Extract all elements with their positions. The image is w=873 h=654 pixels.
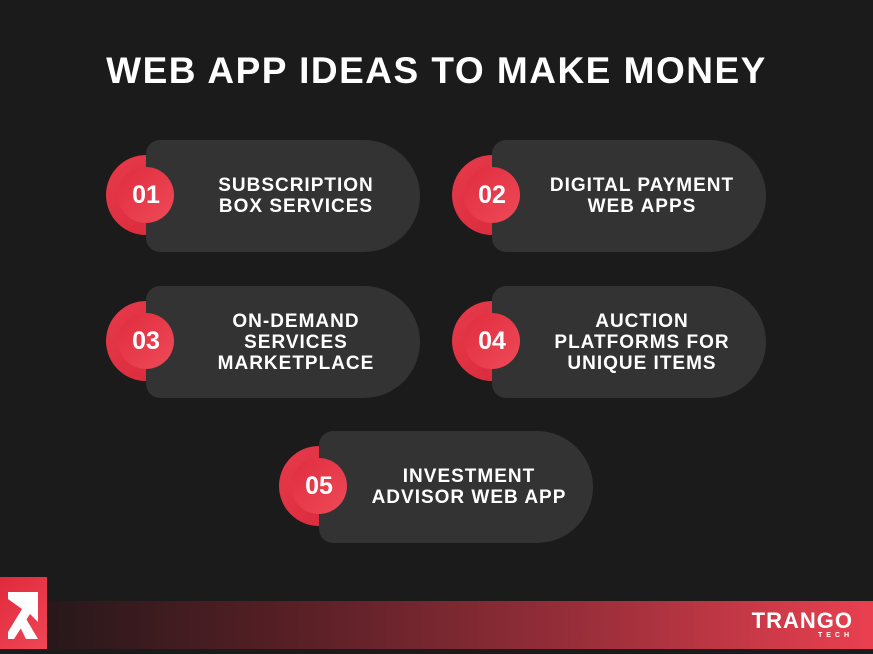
item 01: BOX SERVICES <box>219 196 373 217</box>
item 03: ON-DEMAND <box>232 310 360 332</box>
item 03: 03 <box>132 327 160 355</box>
item 04: PLATFORMS FOR <box>554 332 730 352</box>
item 01: SUBSCRIPTION <box>218 175 374 196</box>
item 04 <box>452 286 766 398</box>
logo icon square <box>0 577 47 649</box>
item 01: 01 <box>132 181 160 209</box>
item 02 <box>452 140 766 252</box>
title: WEB APP IDEAS TO MAKE MONEY <box>106 50 767 91</box>
item 02: 02 <box>478 181 506 209</box>
footer bar <box>0 601 873 649</box>
item 05 <box>279 431 593 543</box>
item 05: 05 <box>305 472 333 500</box>
item 04: 04 <box>478 327 506 355</box>
item 04: UNIQUE ITEMS <box>567 352 717 374</box>
item 05: INVESTMENT <box>403 466 535 487</box>
brand logo text: TRANGO <box>752 608 853 633</box>
item 03: MARKETPLACE <box>218 352 374 374</box>
item 02: WEB APPS <box>588 196 696 217</box>
item 05: ADVISOR WEB APP <box>372 487 566 508</box>
item 03: SERVICES <box>244 332 348 352</box>
item 03 <box>106 286 420 398</box>
item 04: AUCTION <box>595 310 689 332</box>
brand logo text: TECH <box>818 632 853 639</box>
item 02: DIGITAL PAYMENT <box>550 175 734 196</box>
item 01 <box>106 140 420 252</box>
